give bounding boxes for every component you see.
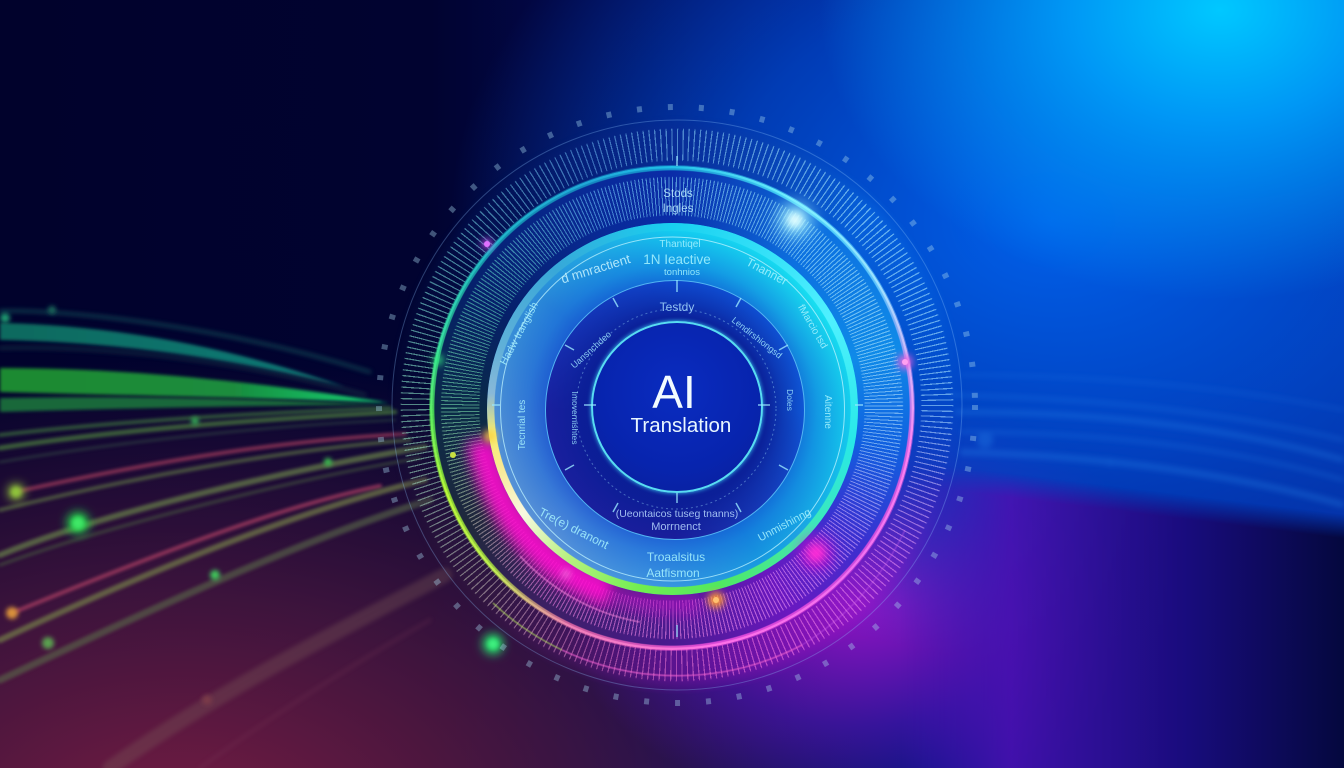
- bright rim glow: [429, 165, 915, 651]
- outer ring labels: Stods: [663, 188, 693, 200]
- inner ring labels: Uansnchdeo: [569, 329, 613, 370]
- glowing nodes: [433, 204, 912, 608]
- middle ring labels: (Ueontaicos tuseg tnanns): [616, 508, 738, 520]
- light translation ring: [487, 223, 858, 595]
- middle ring labels: Hadw tranglish: [498, 300, 541, 367]
- lower right dark panel: [900, 460, 1344, 768]
- middle ring labels: [498, 239, 833, 580]
- outer ring labels: Ingles: [663, 203, 694, 215]
- inner ring labels: Imovernishtes: [570, 392, 580, 444]
- title: AI: AI: [652, 366, 696, 418]
- middle ring labels: 1N Ieactive: [643, 252, 711, 267]
- band between light ring and bright rim: [432, 168, 912, 648]
- outer tick band: [387, 115, 967, 695]
- bright rim: [430, 166, 914, 650]
- outer halo tint: [396, 144, 938, 691]
- inner circle hairlines: [500, 237, 844, 581]
- middle ring labels: Tecnrial tes: [517, 400, 528, 450]
- inner ring labels: Doles: [785, 389, 795, 411]
- middle ring labels: d mnractient: [559, 251, 632, 286]
- middle ring labels: tonhnios: [664, 267, 700, 278]
- inner tick band: [432, 168, 912, 648]
- middle ring labels: Unmishinng: [756, 506, 813, 544]
- middle ring labels: Aitenne: [822, 395, 833, 429]
- outer marker squares: [379, 107, 975, 703]
- inner ring labels: Testdy: [660, 300, 694, 314]
- centre disc: [591, 321, 763, 493]
- inner ring labels: [569, 300, 795, 444]
- middle ring labels: Tnanner: [744, 255, 790, 288]
- ring rim colours: [487, 223, 858, 595]
- title: Translation: Translation: [631, 414, 731, 437]
- ring spokes: [492, 156, 863, 637]
- middle ring labels: Thantiqel: [659, 239, 701, 250]
- middle ring labels: Morrnenct: [651, 521, 701, 533]
- middle ring labels: Aatfismon: [646, 566, 700, 580]
- middle ring labels: fMarcio tsd: [795, 303, 829, 351]
- middle ring labels: Troaalsitus: [647, 550, 705, 564]
- dark inner ring: [545, 280, 805, 540]
- inner ring labels: Lendirshiongsd: [730, 315, 784, 360]
- outer ring labels: [663, 188, 694, 215]
- middle ring labels: Tre(e) dranont: [537, 505, 612, 552]
